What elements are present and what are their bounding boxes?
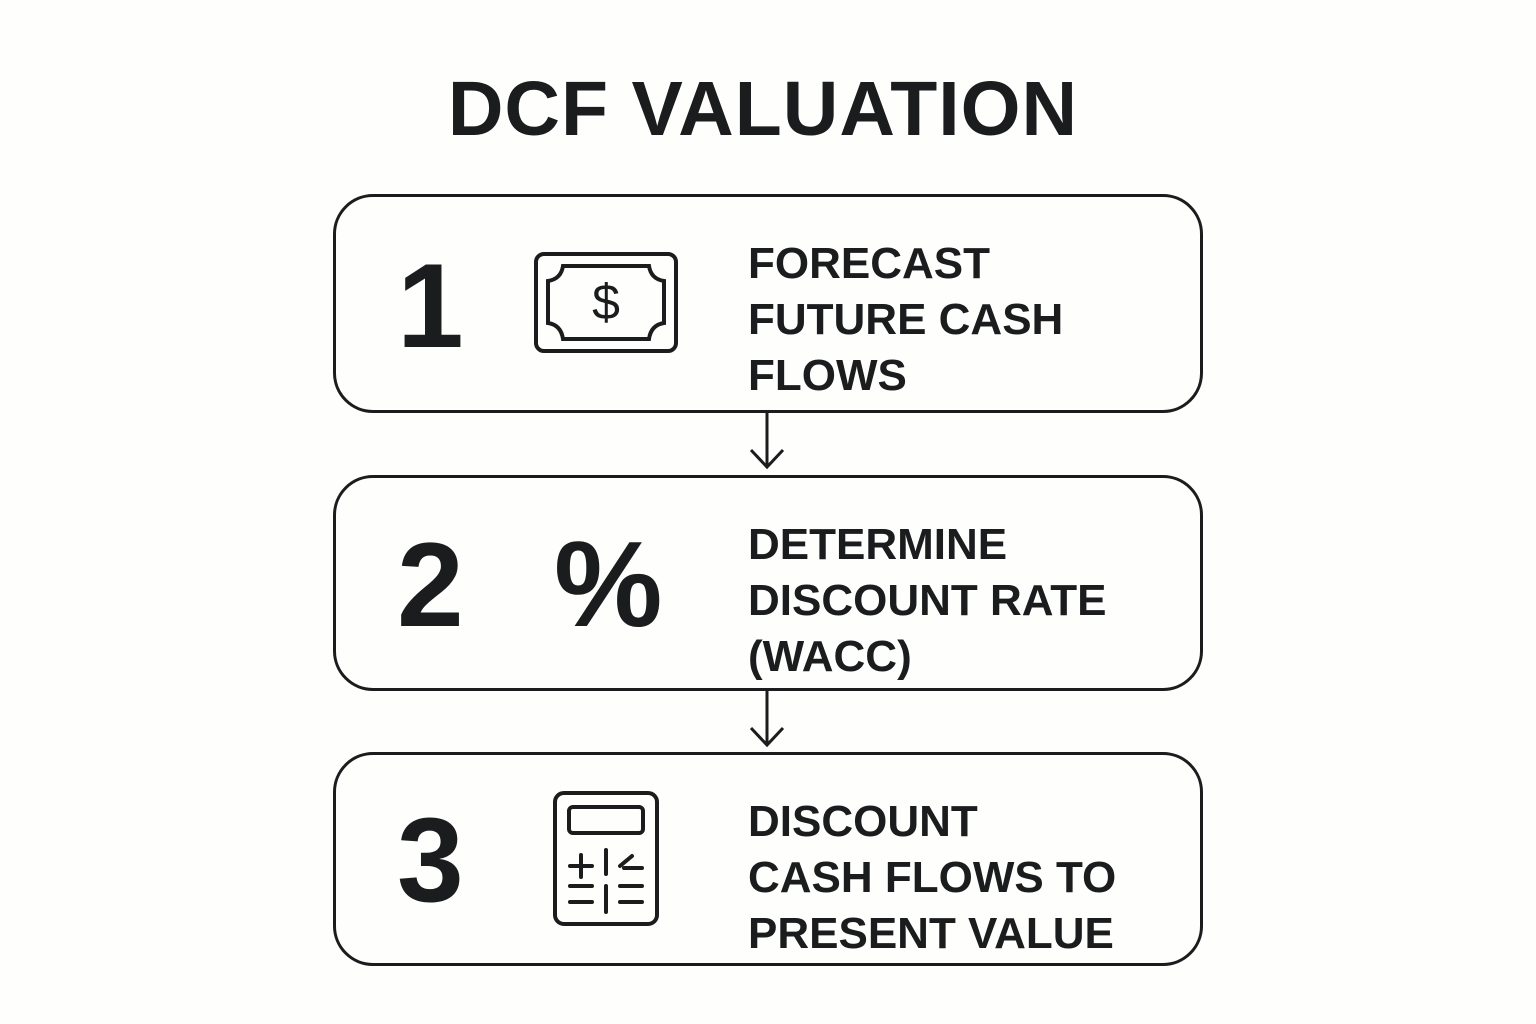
icon: calculator — [553, 791, 659, 926]
text: forecast future cash flows: FUTURE CASH — [748, 295, 1063, 344]
text: forecast future cash flows: FLOWS — [748, 351, 907, 400]
title: DCF VALUATION — [448, 66, 1078, 152]
number 3: 3 — [397, 793, 464, 927]
panel: step 1 — [333, 194, 1203, 413]
number 1: 1 — [397, 239, 464, 373]
text: discount cash flows: PRESENT VALUE — [748, 909, 1114, 958]
text: determine discount rate: (WACC) — [748, 632, 912, 681]
arrow 1 — [750, 413, 784, 470]
icon: percent: % — [554, 516, 662, 652]
panel: step 2 — [333, 475, 1203, 691]
text: discount cash flows — [748, 797, 1116, 958]
icon: banknote: $ — [592, 274, 620, 330]
text: discount cash flows: DISCOUNT — [748, 797, 978, 846]
text: forecast future cash flows: FORECAST — [748, 239, 990, 288]
number 2: 2 — [397, 518, 464, 652]
text: discount cash flows: CASH FLOWS TO — [748, 853, 1116, 902]
icon: banknote — [534, 252, 678, 353]
text: determine discount rate: DETERMINE — [748, 520, 1007, 569]
arrow 2 — [750, 691, 784, 748]
text: determine discount rate — [748, 520, 1107, 681]
text: forecast future cash flows — [748, 239, 1063, 400]
panel: step 3 — [333, 752, 1203, 966]
text: determine discount rate: DISCOUNT RATE — [748, 576, 1107, 625]
